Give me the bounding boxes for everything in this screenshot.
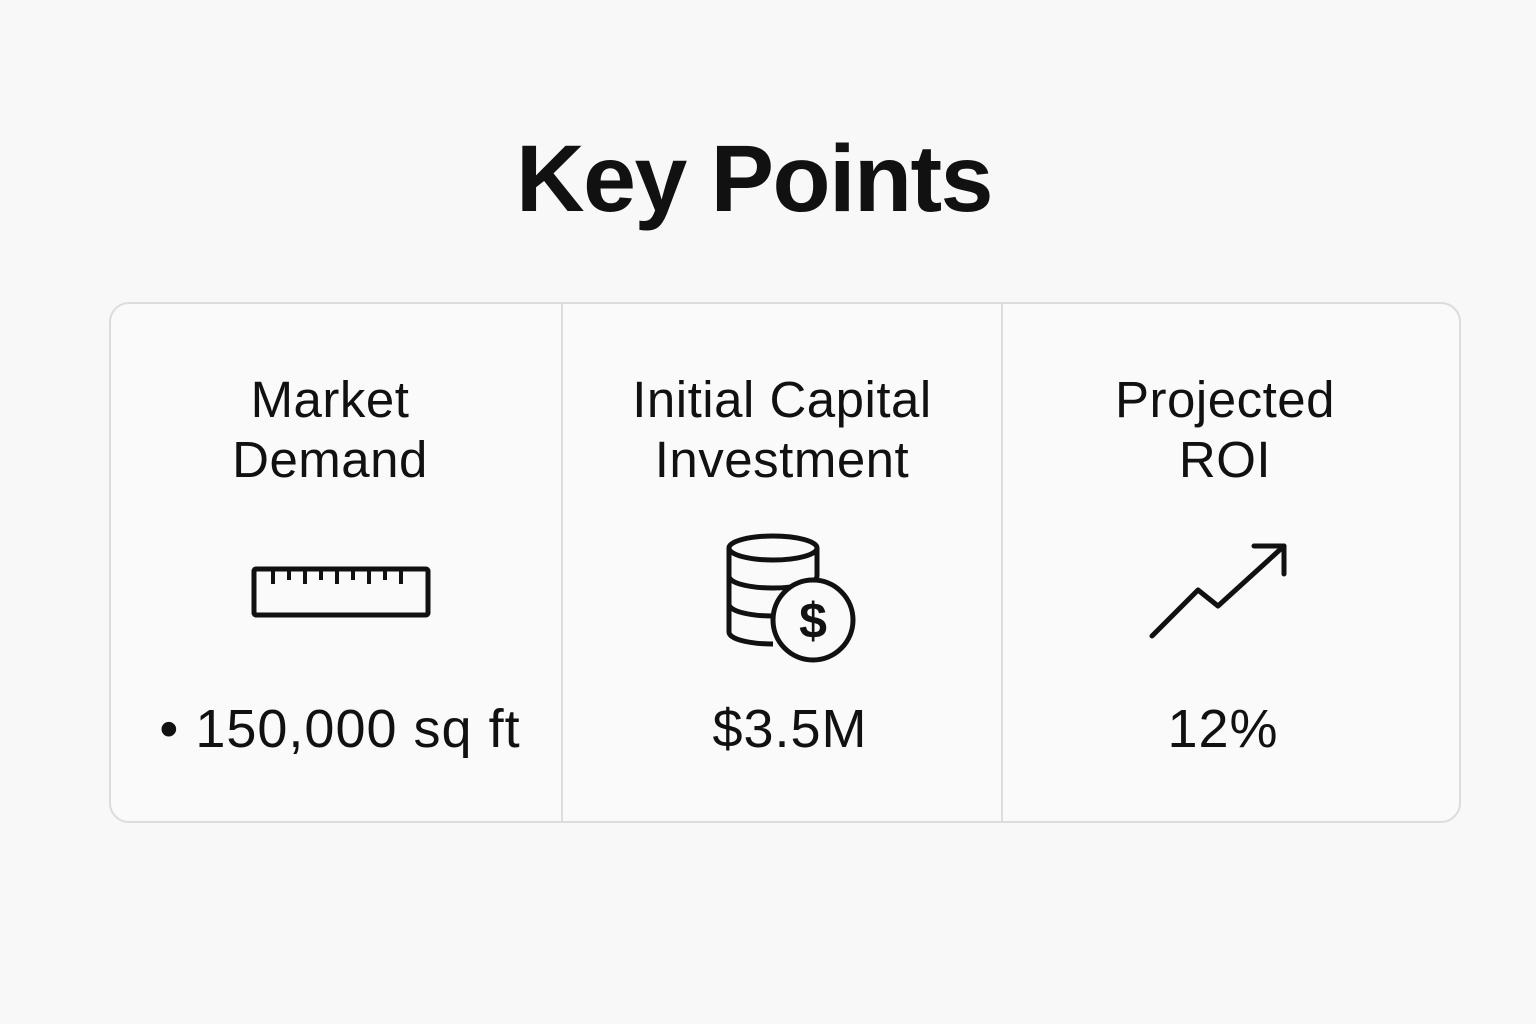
title: Key Points xyxy=(516,126,992,232)
icon: coins with dollar: $ xyxy=(799,593,827,649)
heading: initial capital: Initial Capital xyxy=(632,371,932,428)
heading: initial capital: Investment xyxy=(655,431,909,488)
column: initial capital investment xyxy=(632,371,932,759)
heading: market demand: Demand xyxy=(232,431,428,488)
heading: projected roi: Projected xyxy=(1115,371,1335,428)
icon: coins with dollar xyxy=(726,534,856,662)
column: projected roi xyxy=(1115,371,1335,759)
heading: projected roi xyxy=(1115,371,1335,488)
heading: initial capital xyxy=(632,371,932,488)
value: $3.5M: $3.5M xyxy=(712,699,868,759)
heading: market demand: Market xyxy=(251,371,409,428)
panel: key points card xyxy=(109,302,1461,823)
value: 12%: 12% xyxy=(1167,699,1279,759)
value: 150,000 sq ft: • 150,000 sq ft xyxy=(159,699,521,759)
heading: market demand xyxy=(232,371,428,488)
column: market demand xyxy=(159,371,521,759)
icon: ruler xyxy=(252,566,430,618)
icon: trend arrow xyxy=(1150,544,1286,638)
heading: projected roi: ROI xyxy=(1179,431,1271,488)
